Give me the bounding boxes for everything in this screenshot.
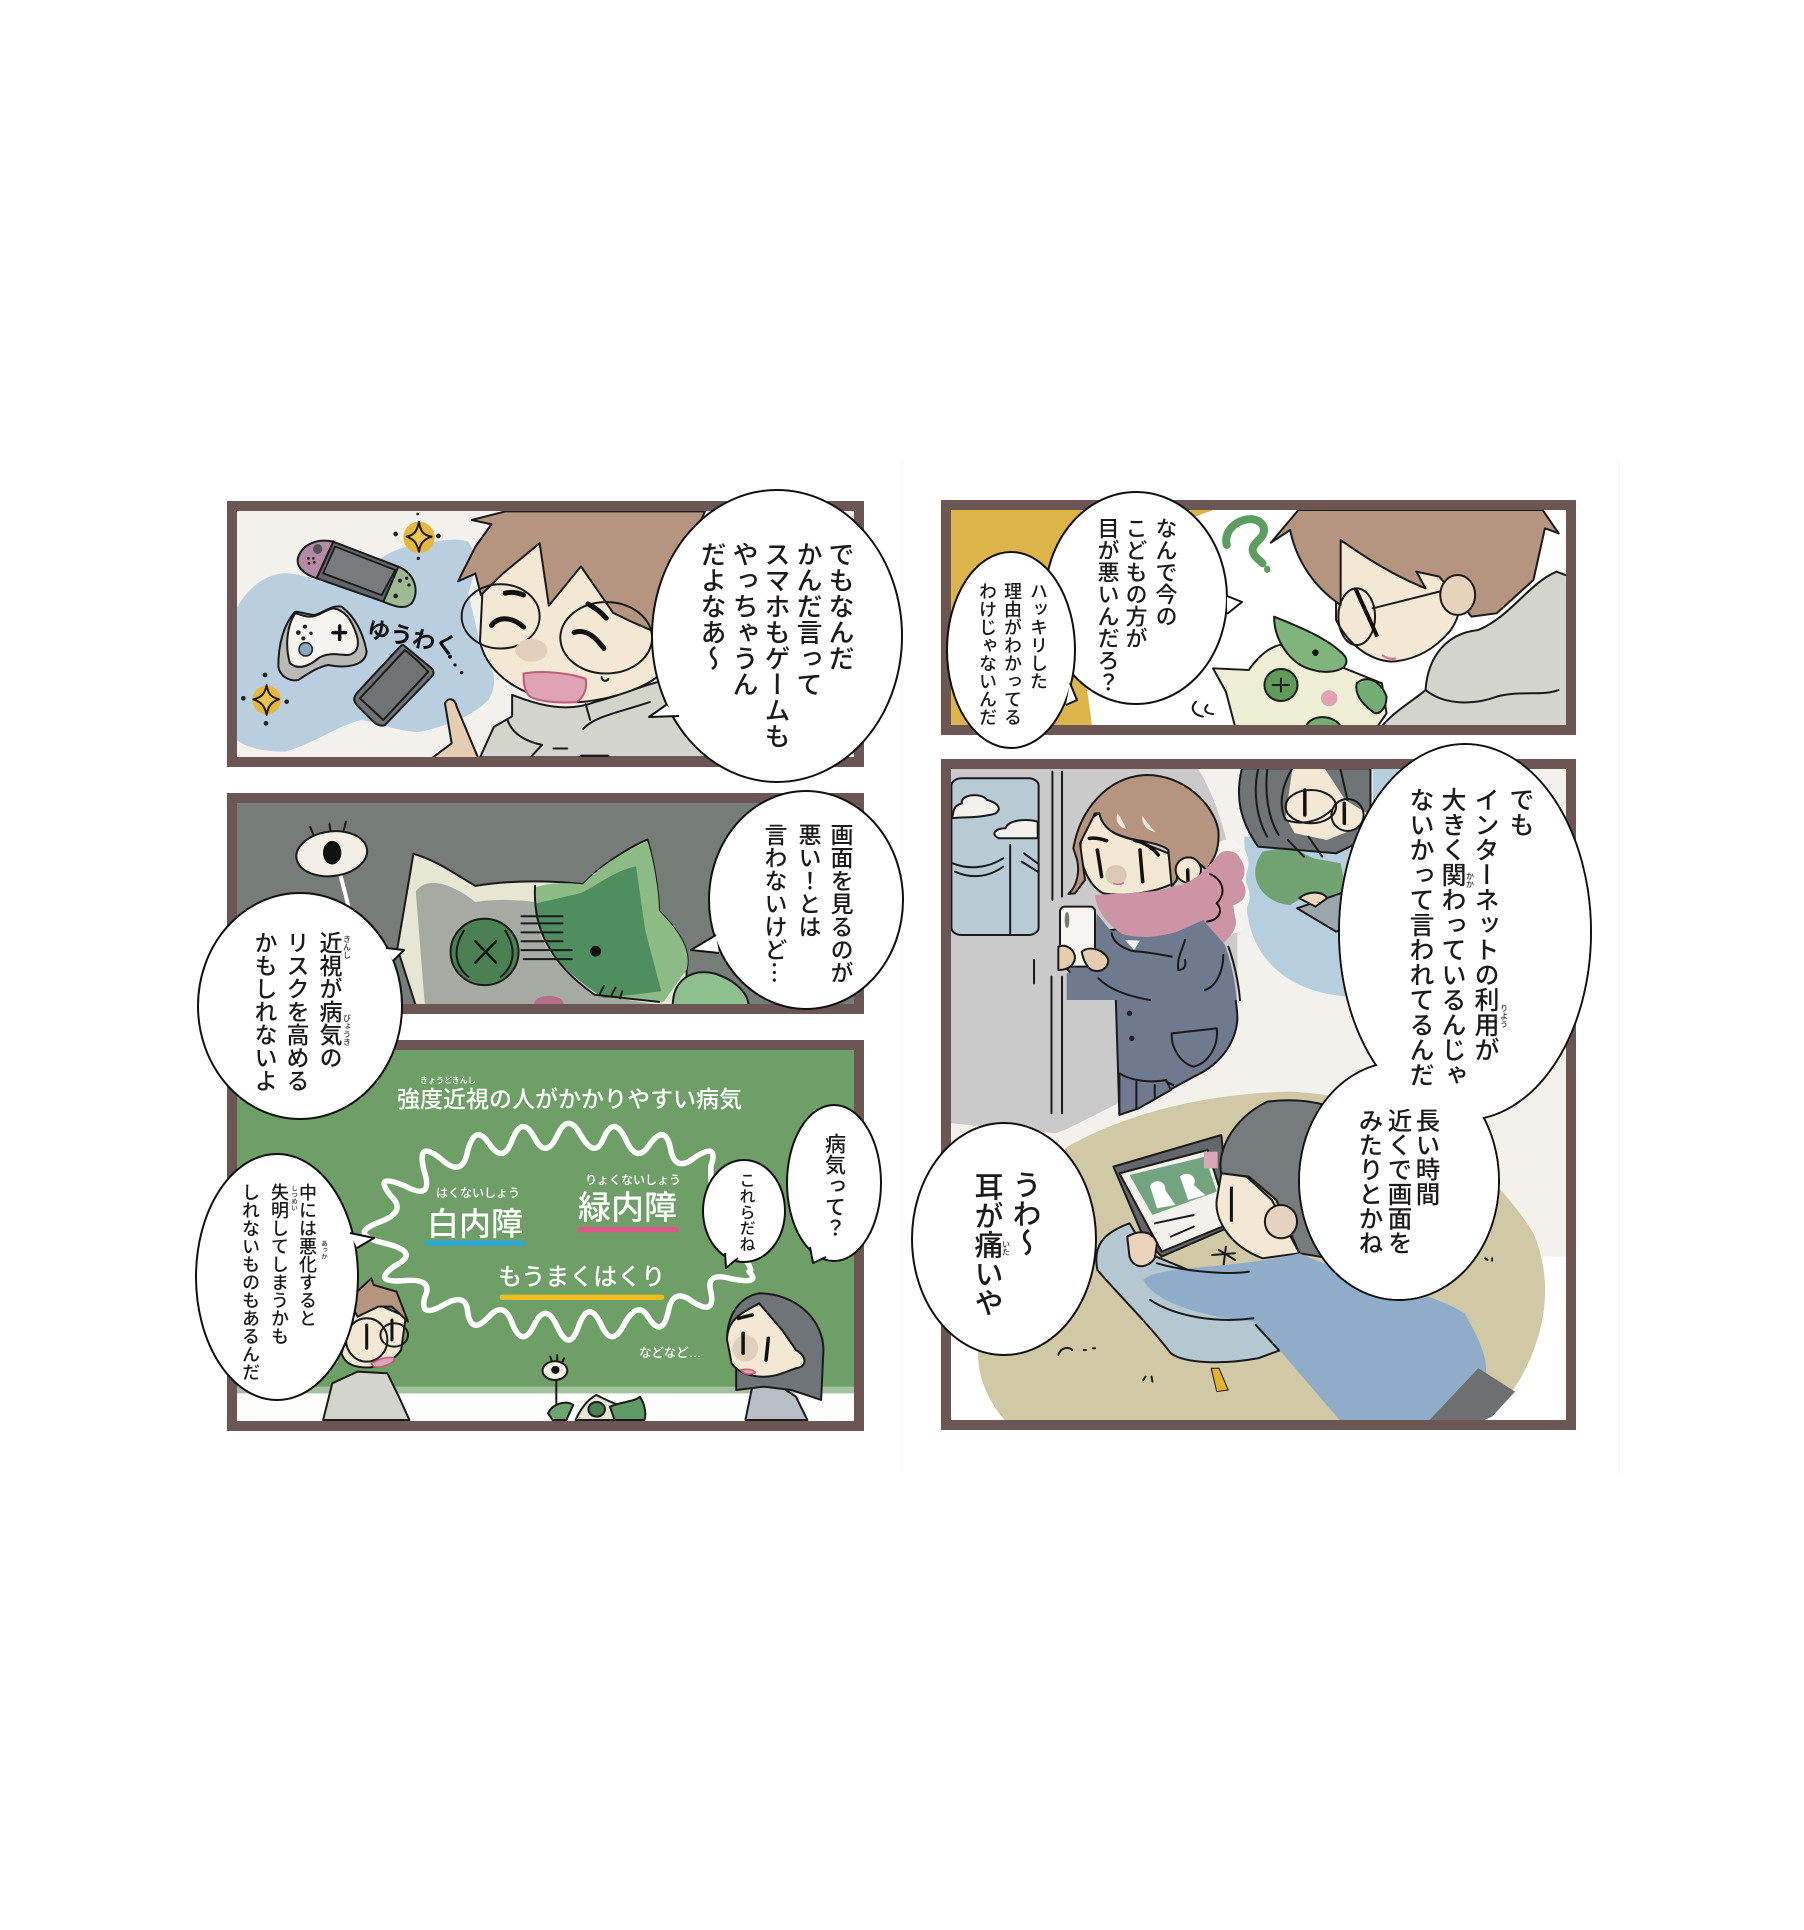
- round rug: [978, 1092, 1545, 1427]
- panel frame: [232, 506, 859, 762]
- speech bubble: internet use and long screen time: インターネットの利用が: [1471, 787, 1500, 1062]
- disease: cataract: はくないしょう: [436, 1186, 520, 1200]
- tablet: [1113, 1135, 1230, 1257]
- panel frame: [946, 764, 1571, 1425]
- disease: retinal detachment: もうまくはくり: [498, 1264, 665, 1291]
- speech bubble: demo nandakanda: [649, 490, 902, 782]
- speech bubble: myopia risk: リスクを高める: [283, 931, 309, 1092]
- icon: game console: [298, 541, 416, 607]
- speech bubble: demo nandakanda: でもなんだ: [825, 541, 855, 671]
- one eye creature: [295, 820, 368, 907]
- speech bubble: why children: [1045, 492, 1242, 704]
- trailing dots: [448, 655, 463, 674]
- disease underlines: [425, 1227, 678, 1300]
- speech bubble: that hurts: いた: [1002, 1240, 1010, 1256]
- panel frame: [232, 1045, 859, 1426]
- speech bubble: internet use and long screen time: かか: [1466, 872, 1474, 888]
- speech bubble: reason unknown: わけじゃないんだ: [977, 582, 997, 726]
- hands: [1058, 946, 1075, 970]
- girl with phone: [1058, 775, 1250, 1000]
- woman in background: [1239, 768, 1373, 932]
- speech bubble: some may cause blindness: [196, 1154, 374, 1400]
- question mark: [1226, 519, 1270, 573]
- speech bubble: why children: なんで今の: [1152, 517, 1178, 627]
- speech bubble: demo nandakanda: かんだ言って: [793, 541, 823, 697]
- speech bubble: diseases?: 病気って？: [822, 1133, 846, 1238]
- handwritten word: yuuwaku: ゆうわく: [365, 615, 460, 660]
- disease: cataract: [427, 1186, 523, 1242]
- girl character: [727, 1293, 823, 1420]
- panel: internet use on train and sofa: [941, 757, 1584, 1427]
- speech bubble: myopia risk: びょうき: [342, 1013, 352, 1046]
- speech bubble: internet use and long screen time: [1299, 744, 1591, 1300]
- disease: glaucoma: りょくないしょう: [585, 1173, 681, 1187]
- speech bubble: internet use and long screen time: 近くで画面を: [1384, 1108, 1412, 1255]
- speech bubble: that hurts: うわ〜: [1008, 1170, 1040, 1257]
- pillow: [1096, 1223, 1281, 1362]
- hair: [1271, 510, 1559, 617]
- speech bubble: screen not bad: [691, 791, 903, 1009]
- panel frame: [232, 798, 859, 1009]
- ear: [1176, 857, 1201, 883]
- face: [480, 534, 664, 702]
- speech bubble: myopia risk: 近視が病気の: [316, 931, 342, 1069]
- speech bubble: that hurts: [912, 1123, 1096, 1355]
- disease: cataract: 白内障: [427, 1206, 523, 1242]
- speech bubble: these: [703, 1160, 785, 1268]
- hair: [458, 511, 705, 631]
- speech bubble: some may cause blindness: 失明してしまうかも: [269, 1183, 289, 1345]
- speech bubble: myopia risk: [198, 893, 404, 1119]
- and so on: などなど…: [639, 1346, 701, 1360]
- disease: glaucoma: [578, 1173, 681, 1226]
- panel frame: [946, 505, 1571, 730]
- jacket: [480, 681, 709, 757]
- speech bubble: internet use and long screen time: ないかって言われてるんだ: [1406, 787, 1434, 1087]
- board title: きょうどきんし: [420, 1075, 476, 1085]
- speech bubble: reason unknown: [947, 552, 1077, 748]
- speech bubble: some may cause blindness: あっか: [320, 1240, 328, 1260]
- speech bubble: some may cause blindness: しれないものもあるんだ: [240, 1183, 260, 1381]
- speech bubble: why children: 目が悪いんだろ？: [1094, 517, 1120, 693]
- speech bubble: screen not bad: 悪い！とは: [795, 823, 822, 938]
- speech bubble: internet use and long screen time: 大きく関わっているんじゃ: [1438, 787, 1466, 1087]
- speech bubble: diseases?: [787, 1105, 881, 1263]
- speech bubble: myopia risk: かもしれないよ: [251, 931, 277, 1092]
- glasses: [1338, 588, 1439, 645]
- yellow background: [951, 510, 1212, 725]
- tassel: [1211, 1368, 1228, 1392]
- cat hand: [673, 972, 749, 1006]
- pointing finger: [432, 699, 478, 758]
- panel: child eyesight question: [951, 510, 1566, 725]
- coat top: [1067, 913, 1237, 1000]
- speech bubble: internet use and long screen time: でも: [1506, 787, 1534, 837]
- blue blob behind woman: [1244, 768, 1405, 1003]
- head: [1220, 1100, 1359, 1260]
- mini one-eye creature and cat: [543, 1355, 645, 1420]
- jacket: [1382, 572, 1570, 727]
- icon: smartphone: [354, 645, 434, 726]
- speech bubble: internet use and long screen time: りよう: [1500, 1004, 1508, 1028]
- train window: [951, 778, 1039, 935]
- legs and coat details: [1034, 960, 1217, 1115]
- icon: game controller: [278, 606, 367, 680]
- speech bubble: screen not bad: 言わないけど…: [759, 823, 793, 984]
- glasses: [462, 584, 652, 673]
- speech bubble: that hurts: 耳が痛いや: [970, 1172, 1004, 1317]
- page gutter lines: [902, 461, 1619, 1473]
- panel: blackboard cat: [237, 803, 854, 1004]
- board title: 強度近視の人がかかりやすい病気: [397, 1086, 742, 1112]
- speech bubble: internet use and long screen time: みたりとかね: [1356, 1108, 1382, 1255]
- speech bubble: demo nandakanda: だよなあ〜: [697, 541, 727, 671]
- icon: sparkles: [241, 513, 441, 726]
- cat head: [397, 839, 688, 1012]
- speech bubble: some may cause blindness: しつめい: [290, 1185, 298, 1211]
- face: [1336, 540, 1459, 662]
- button eye: [451, 919, 519, 985]
- blue blob background: [237, 540, 494, 752]
- speech bubble: screen not bad: 画面を見るのが: [827, 823, 854, 984]
- speech bubble: internet use and long screen time: 長い時間: [1412, 1108, 1440, 1206]
- closed eyes: [491, 592, 606, 648]
- wavy starburst: [364, 1123, 753, 1340]
- panel: game temptation: [237, 511, 854, 757]
- boy on rug: [1058, 1100, 1515, 1427]
- speech bubble: demo nandakanda: やっちゃうん: [729, 541, 759, 697]
- open mouth: [524, 672, 586, 703]
- speech bubble: these: これらだね: [736, 1172, 756, 1252]
- train door: [941, 763, 1237, 1133]
- plush cat: [1193, 617, 1387, 727]
- coat body: [1065, 918, 1237, 1115]
- scarf puffs: [1207, 840, 1250, 937]
- speech bubble: why children: こどもの方が: [1122, 517, 1148, 649]
- speech bubble: demo nandakanda: スマホもゲームも: [761, 541, 791, 749]
- sweater: [1143, 1253, 1486, 1427]
- face: [1081, 813, 1173, 895]
- speech bubble: reason unknown: 理由がわかってる: [1002, 582, 1022, 726]
- hair: [1068, 775, 1219, 894]
- speech bubble: myopia risk: きんし: [342, 935, 352, 959]
- boy character: [323, 1278, 409, 1420]
- speech bubble: some may cause blindness: 中には悪化すると: [297, 1183, 317, 1327]
- grey leg: [1423, 1368, 1515, 1427]
- speech bubble: reason unknown: ハッキリした: [1028, 582, 1048, 690]
- disease: glaucoma: 緑内障: [578, 1189, 677, 1226]
- phone: [1060, 907, 1095, 967]
- scarf: [1095, 851, 1245, 943]
- panel: diseases blackboard: [237, 1050, 854, 1421]
